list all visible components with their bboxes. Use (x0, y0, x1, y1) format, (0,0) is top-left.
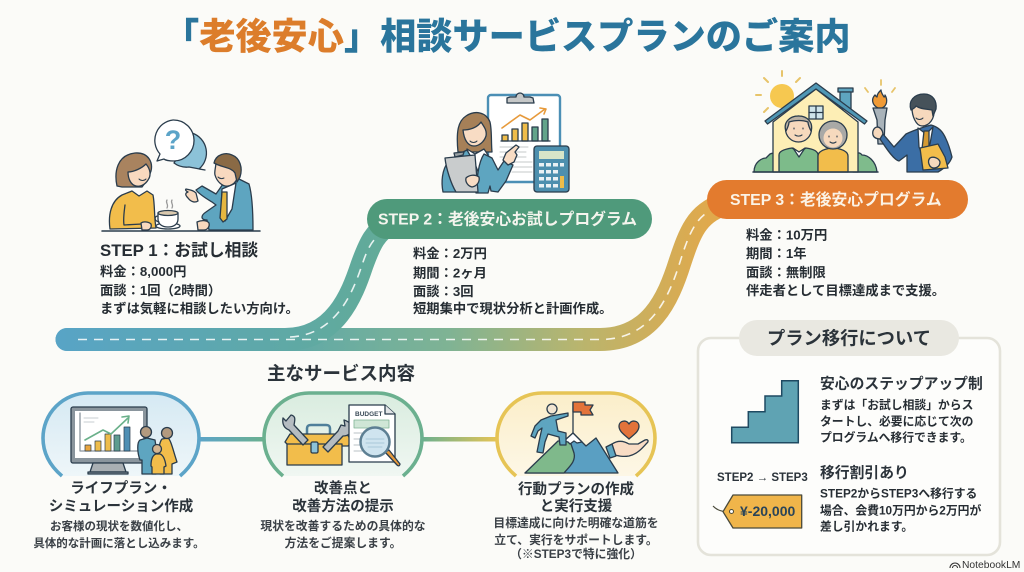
service 2 heading: 改善方法の提示 (292, 497, 394, 515)
step 3 text block: 面談：無制限 (746, 264, 826, 280)
service 3 description: （※STEP3で特に強化） (510, 547, 642, 561)
service 2 description: 方法をご提案します。 (285, 536, 401, 550)
service 3 description: 目標達成に向けた明確な道筋を (493, 516, 659, 530)
badge (264, 393, 422, 476)
service 3 heading: と実行支援 (540, 498, 613, 515)
icon: question speech bubble (155, 120, 194, 161)
house (765, 83, 867, 172)
step 3 pill (707, 180, 968, 219)
icon: discount price tag (713, 495, 802, 528)
calculator (534, 146, 569, 192)
badge (43, 393, 199, 476)
step-up description (820, 398, 973, 444)
service 3 heading (518, 480, 634, 515)
step 3 text block (746, 226, 945, 298)
service 1 heading (49, 480, 194, 515)
sun (756, 71, 800, 112)
step 2 text block: 短期集中で現状分析と計画作成。 (413, 300, 612, 316)
discount description: STEP2からSTEP3へ移行する (820, 486, 977, 500)
panel frame (698, 338, 1000, 555)
discount description (820, 486, 981, 534)
panel heading (739, 320, 959, 356)
clipboard with chart (488, 93, 560, 182)
bushes (754, 153, 877, 172)
connector lines between services (199, 437, 497, 442)
torch (865, 80, 895, 144)
service 2 heading: 改善点と (314, 479, 372, 497)
service 1: life plan simulation (33, 393, 205, 550)
step 3 text block: 期間：1年 (746, 245, 807, 261)
step 2 pill: STEP 2：老後安心お試しプログラム (378, 210, 637, 228)
icon: heart in open hand (606, 421, 648, 458)
discount heading: 移行割引あり (820, 464, 909, 482)
badge (497, 393, 655, 476)
step 1 text block: 料金：8,000円 (100, 263, 186, 279)
service 1 description (33, 519, 205, 550)
icon: toolbox with wrenches (283, 415, 352, 465)
icon: step 3 home and supporter illustration (753, 71, 952, 172)
panel: plan transition (698, 320, 1000, 555)
step 1 text block: STEP 1：お試し相談 (100, 241, 258, 260)
man consultant (186, 154, 253, 230)
table line (102, 230, 260, 232)
panel heading: プラン移行について (767, 328, 931, 348)
step 2 pill (367, 199, 652, 239)
step 3 text block: 伴走者として目標達成まで支援。 (746, 282, 945, 298)
discount description: 場合、会費10万円から2万円が (820, 504, 981, 518)
service 2: improvement proposal (260, 393, 426, 550)
service 3 heading: 行動プランの作成 (518, 480, 634, 498)
icon: climber on mountain with flag (525, 402, 618, 473)
icon: budget document and magnifier: BUDGET (355, 411, 382, 418)
coffee cup (155, 200, 180, 229)
step 2 text block (413, 245, 612, 316)
ground line (753, 171, 878, 173)
service 1 heading: ライフプラン・ (70, 480, 172, 497)
woman client (109, 153, 156, 230)
service 3 description: 立て、実行をサポートします。 (494, 533, 658, 547)
step-up description: タートし、必要に応じて次の (820, 414, 973, 428)
step 2 text block: 面談：3回 (413, 284, 474, 299)
icon: budget document and magnifier (349, 405, 400, 466)
step 1 text block: まずは気軽に相談したい方向け。 (100, 300, 299, 316)
title: 「老後安心」相談サービスプランのご案内 (163, 16, 851, 57)
watermark: NotebookLM (962, 560, 1020, 571)
service 1 description: お客様の現状を数値化し、 (50, 519, 188, 533)
step 3 text block: 料金：10万円 (746, 226, 827, 242)
step 2 text block: 期間：2ヶ月 (413, 266, 487, 280)
icon: stairs (732, 381, 798, 443)
icon: discount price tag: ¥-20,000 (740, 503, 795, 519)
step-up heading: 安心のステップアップ制 (820, 374, 983, 392)
icon: step 1 consultation illustration (102, 120, 260, 231)
step 2 text block: 料金：2万円 (413, 245, 487, 261)
elderly couple (779, 116, 848, 172)
step 1 text block: 面談：1回（2時間） (100, 282, 221, 298)
service 3: action plan (493, 393, 659, 561)
service 1 heading: シミュレーション作成 (49, 497, 194, 515)
heading: main services: 主なサービス内容 (267, 363, 416, 384)
STEP2 to STEP3 label: STEP2 → STEP3 (717, 472, 808, 484)
service 2 heading (292, 479, 394, 515)
icon: step 2 analyst illustration (442, 93, 569, 193)
step 1 text block (100, 241, 299, 316)
step 3 pill: STEP 3：老後安心プログラム (730, 190, 942, 209)
service 1 description: 具体的な計画に落とし込みます。 (33, 536, 205, 550)
icon: question speech bubble: ? (165, 125, 181, 155)
woman analyst (442, 113, 519, 193)
discount description: 差し引かれます。 (820, 520, 913, 534)
step-up description: まずは「お試し相談」からス (820, 398, 973, 412)
road path connecting the three steps (67, 205, 722, 340)
step-up description: プログラムへ移行できます。 (820, 430, 972, 444)
service 3 description (493, 516, 659, 561)
service 2 description (260, 519, 426, 550)
service 2 description: 現状を改善するための具体的な (260, 519, 426, 533)
icon: monitor and family (71, 407, 177, 474)
icon: blue speech bubble (174, 133, 206, 170)
supporter man (880, 94, 952, 172)
